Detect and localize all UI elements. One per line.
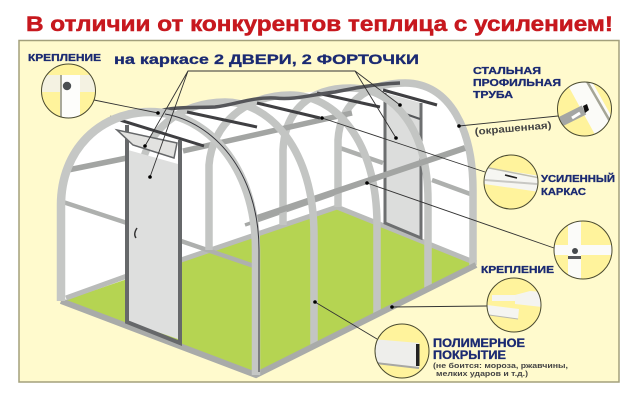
- callout: reinforced frame: [484, 155, 540, 209]
- callout: steel profile tube: [557, 82, 612, 136]
- label: steel tube: [473, 66, 561, 101]
- longitudinal tube upper: [68, 113, 352, 170]
- front arch: [61, 112, 259, 375]
- label: polymer coating: ПОКРЫТИЕ: [433, 350, 506, 362]
- callout lines: [94, 71, 558, 339]
- label: steel tube: ПРОФИЛЬНАЯ: [473, 78, 561, 89]
- note: polymer coating: (не боится: мороза, ржавчины,: [433, 362, 568, 370]
- callout: cross fastening: [553, 220, 613, 282]
- front door: [117, 125, 180, 343]
- label: reinforced frame: КАРКАС: [541, 187, 586, 198]
- label: fastening top: КРЕПЛЕНИЕ: [28, 52, 101, 64]
- arch 2: [140, 102, 314, 346]
- longitudinal tube lower: [257, 148, 465, 218]
- callout: fastening top left: [40, 64, 96, 120]
- arch 4: [283, 88, 428, 289]
- floor back frame: [66, 192, 476, 298]
- title: В отличии от конкурентов теплица с усилением!: [26, 13, 613, 36]
- label: reinforced frame: УСИЛЕННЫЙ: [541, 172, 615, 185]
- note: polymer coating: мелких ударов и т.д.): [436, 371, 528, 378]
- label: reinforced frame: [541, 172, 615, 198]
- back arch: [338, 83, 473, 265]
- back door: [385, 93, 421, 238]
- label: polymer coating: ПОЛИМЕРНОЕ: [433, 338, 525, 350]
- note: polymer coating: [433, 362, 568, 378]
- interior white area: [61, 83, 476, 375]
- label: steel tube: СТАЛЬНАЯ: [473, 66, 541, 77]
- greenhouse illustration: [61, 83, 476, 375]
- front base frame: [61, 265, 476, 375]
- label: fastening bottom: КРЕПЛЕНИЕ: [481, 264, 554, 276]
- label: painted: (окрашенная): [474, 120, 552, 138]
- heading: doors and vents: на каркасе 2 ДВЕРИ, 2 ФОРТОЧКИ: [114, 51, 419, 67]
- floor: [66, 207, 476, 375]
- roof purlins: [110, 90, 437, 146]
- callout: polymer coating: [372, 324, 429, 378]
- label: steel tube: ТРУБА: [473, 90, 513, 101]
- label: polymer coating: [433, 338, 525, 362]
- arch 3: [209, 95, 377, 314]
- callout: joint fastening: [487, 278, 542, 332]
- ridge: [155, 83, 400, 112]
- side bars: [63, 148, 473, 266]
